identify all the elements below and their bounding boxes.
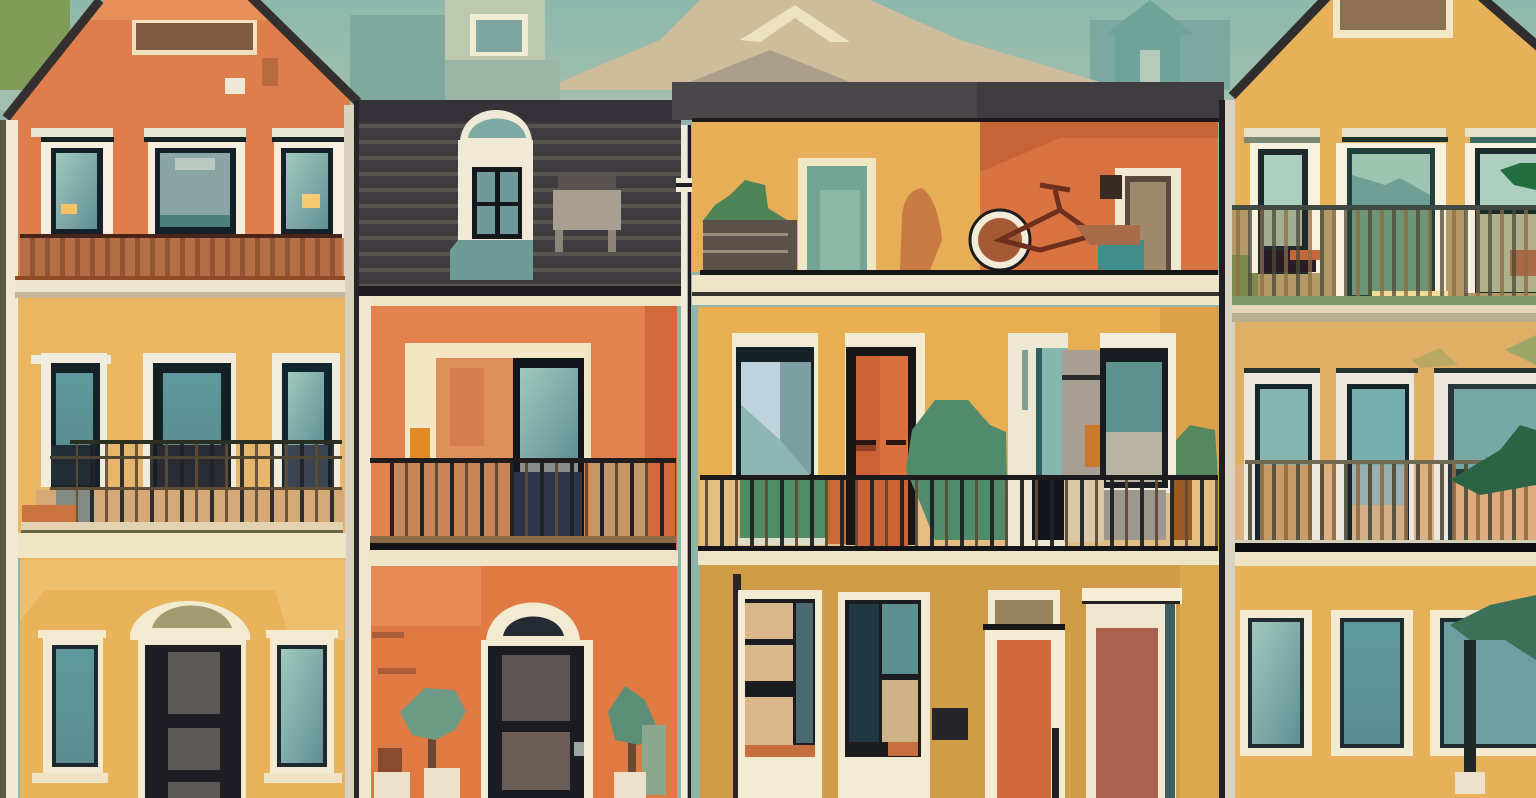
street tree xyxy=(1450,595,1536,794)
lower wall xyxy=(1235,566,1536,798)
potted tree left xyxy=(374,748,410,798)
terrace wall orange xyxy=(980,122,1218,272)
floor 2 lower tan band xyxy=(36,445,344,527)
side trim xyxy=(0,120,18,798)
terrace door right xyxy=(1115,168,1181,272)
divider: lamp post xyxy=(676,125,706,798)
upper balcony dark box xyxy=(1260,250,1316,272)
bicycle and person xyxy=(970,175,1144,270)
ledge xyxy=(698,551,1220,565)
ledge xyxy=(692,275,1222,305)
floor 1 balcony railing xyxy=(15,234,345,280)
gable wall xyxy=(10,0,350,282)
balcony backing panel xyxy=(395,462,510,544)
ledge 2 xyxy=(18,522,346,558)
middle window 1 xyxy=(732,333,846,545)
distant teal house xyxy=(1105,0,1195,85)
potted tree middle xyxy=(400,688,466,798)
gable roof edge xyxy=(1232,0,1536,96)
lower window 1 xyxy=(738,590,822,798)
planter box xyxy=(702,180,797,270)
flat roof xyxy=(672,82,1224,120)
building 4: right yellow house xyxy=(1219,0,1536,798)
middle window 3 xyxy=(1008,333,1176,547)
gable roof edge xyxy=(6,0,358,118)
floor 2 balcony railing xyxy=(22,440,342,528)
ledge 1 xyxy=(15,280,345,298)
middle door orange xyxy=(845,333,925,546)
floor 2 wall xyxy=(18,298,345,538)
ground floor right window xyxy=(264,630,342,783)
middle lower tan band xyxy=(700,480,1218,546)
terrace glass door xyxy=(798,158,876,272)
lower window 2 xyxy=(838,592,930,798)
terrace base line xyxy=(700,270,1218,275)
floor 3 wall xyxy=(20,558,345,798)
mid windows xyxy=(1244,368,1536,540)
ledge xyxy=(368,550,678,566)
floor 1 windows xyxy=(31,128,344,238)
upper balcony backing xyxy=(1232,210,1536,296)
attic vent xyxy=(132,20,257,55)
mid lower tan band xyxy=(1235,465,1536,541)
lower door orange xyxy=(983,590,1065,798)
middle yellow wall xyxy=(698,307,1220,550)
distant beige roof xyxy=(560,0,1100,90)
potted tree right xyxy=(608,686,666,798)
front door with arch xyxy=(481,602,593,798)
building 3: wide apartment block xyxy=(672,82,1224,798)
distant tower xyxy=(445,0,560,100)
attic window xyxy=(1333,0,1453,38)
roof vent box xyxy=(553,172,621,252)
lower door mauve xyxy=(1082,588,1182,798)
mid wall xyxy=(1235,322,1536,548)
building 2: dark roof and orange house xyxy=(359,100,681,798)
lower windows xyxy=(1240,610,1536,756)
plant right xyxy=(1176,425,1218,480)
silhouette on wall xyxy=(900,188,942,270)
mailbox xyxy=(932,708,968,740)
background: sky and distant buildings xyxy=(0,0,1536,110)
floor 2 windows xyxy=(31,353,340,526)
lower orange wall xyxy=(371,566,677,798)
ledge xyxy=(1235,540,1536,543)
terrace wall yellow xyxy=(692,122,980,272)
upper balcony railing xyxy=(1232,205,1536,305)
branch foliage xyxy=(1450,425,1536,495)
ground floor door with arch xyxy=(130,601,250,798)
ledge xyxy=(359,296,681,306)
gable wall xyxy=(1235,0,1536,310)
balcony door xyxy=(405,343,591,538)
upper orange wall xyxy=(371,306,677,550)
lower wall xyxy=(700,565,1220,798)
ground floor left window xyxy=(32,630,108,783)
middle railing xyxy=(698,475,1218,551)
dormer window xyxy=(450,110,533,280)
upper windows xyxy=(1244,128,1536,298)
balcony railing xyxy=(370,458,676,550)
mid railing xyxy=(1245,460,1536,540)
middle shrub xyxy=(906,400,1008,540)
ledge xyxy=(1232,305,1536,322)
building 1: left orange and yellow house xyxy=(0,0,359,798)
shingled roof xyxy=(359,100,681,295)
